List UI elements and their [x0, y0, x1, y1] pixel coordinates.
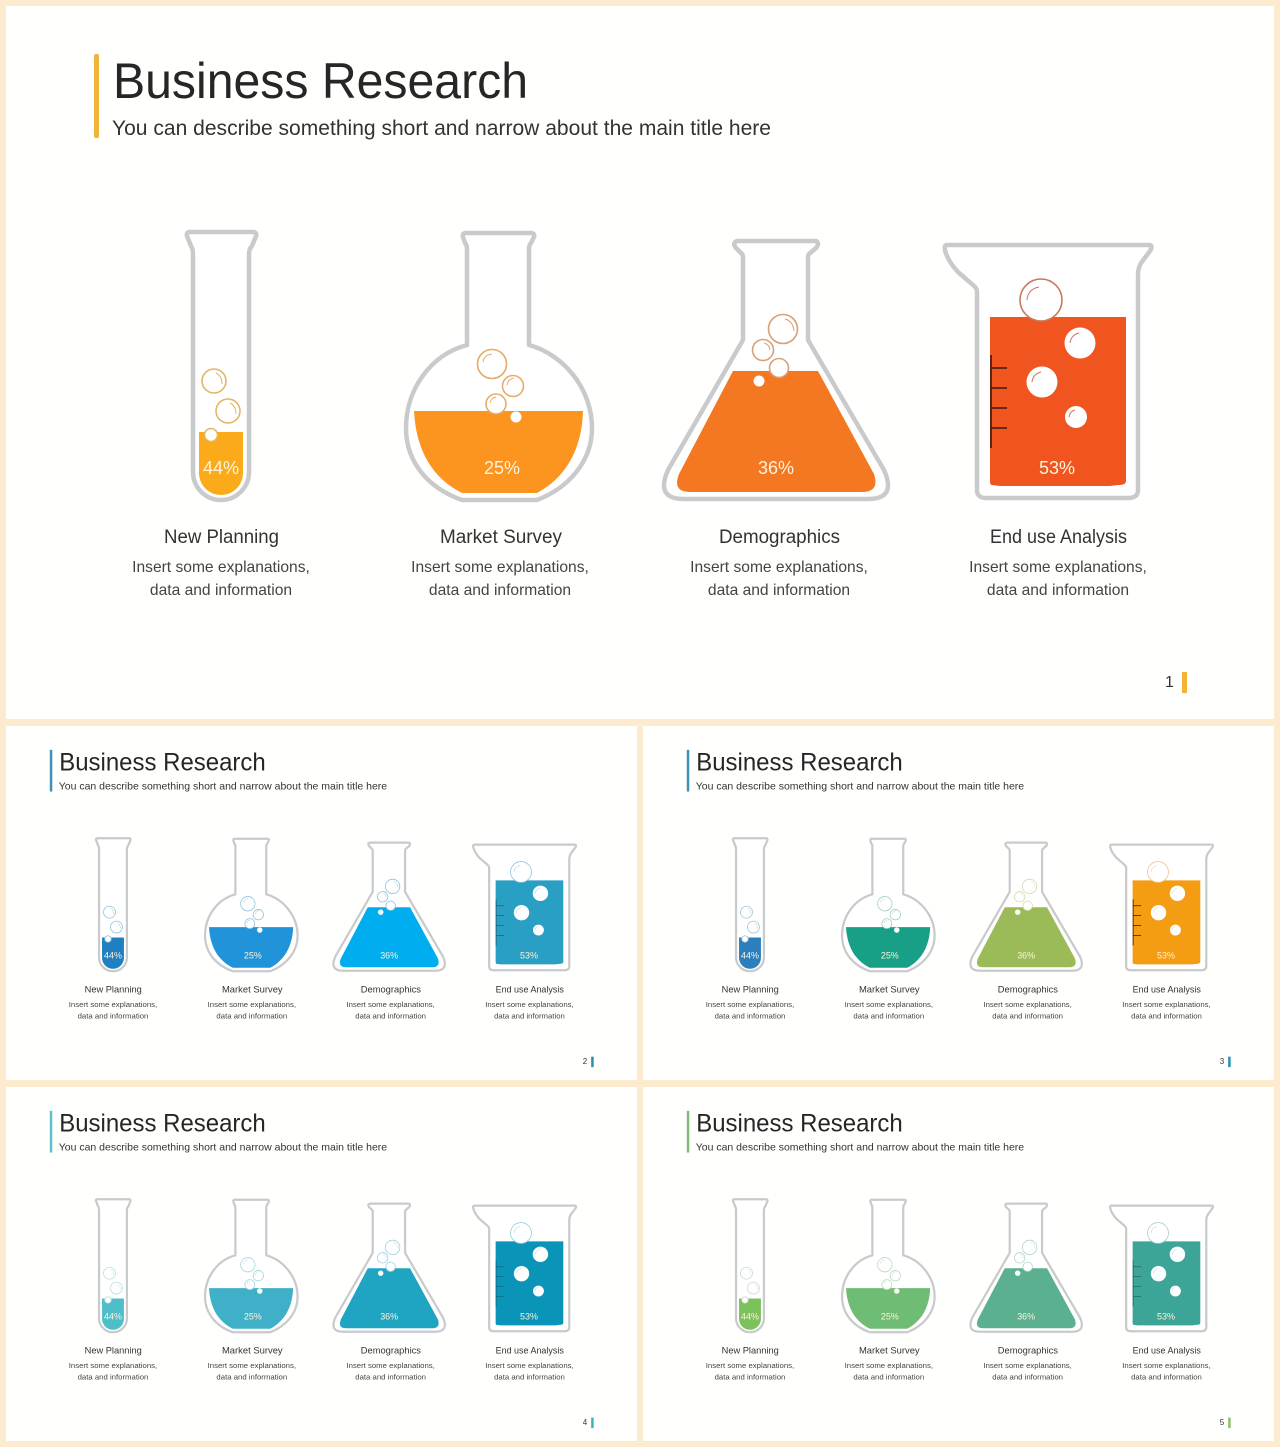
- panel background: [6, 1087, 637, 1441]
- icon: test tube 44%: [187, 232, 256, 500]
- icon: conical flask 36%: [333, 1204, 445, 1332]
- icon: conical flask 36%: [664, 241, 888, 499]
- icon: round flask 25%: [842, 839, 935, 971]
- column: New Planning: [69, 985, 157, 1020]
- slide 1: amber: [6, 6, 1274, 719]
- panel background: [6, 6, 1274, 719]
- column: New Planning: Insert some explanations,: [706, 1361, 794, 1370]
- icon: conical flask 36%: 36%: [758, 458, 794, 478]
- icon: beaker 53%: [473, 845, 576, 970]
- icon: beaker 53%: 53%: [1039, 458, 1075, 478]
- subtitle: You can describe something short and narrow about the main title here: [696, 782, 1024, 793]
- icon: conical flask 36%: 36%: [1017, 1311, 1035, 1321]
- icon: beaker 53%: 53%: [520, 1311, 538, 1321]
- column: Market Survey: data and information: [216, 1372, 287, 1381]
- column: New Planning: New Planning: [85, 985, 142, 996]
- title: Business Research: [113, 53, 528, 109]
- icon: test tube 44%: [733, 838, 768, 971]
- icon: round flask 25%: 25%: [881, 950, 899, 960]
- title accent bar: [94, 54, 99, 138]
- page number: 1: [1165, 674, 1174, 691]
- icon: beaker 53%: [1110, 845, 1213, 970]
- column: Demographics: data and information: [708, 582, 850, 599]
- column: Demographics: Demographics: [719, 527, 840, 548]
- column: End use Analysis: Insert some explanations,: [1122, 1000, 1211, 1009]
- icon: beaker 53%: 53%: [1157, 950, 1175, 960]
- column: Market Survey: Insert some explanations,: [208, 1000, 296, 1009]
- column: End use Analysis: data and information: [494, 1372, 565, 1381]
- page number: [583, 1418, 594, 1428]
- page number: 4: [583, 1418, 588, 1427]
- page number: [583, 1057, 594, 1067]
- column: New Planning: data and information: [150, 582, 292, 599]
- icon: round flask 25%: 25%: [244, 950, 262, 960]
- page number: 5: [1220, 1418, 1225, 1427]
- icon: test tube 44%: 44%: [741, 1311, 759, 1321]
- column: Demographics: Insert some explanations,: [983, 1361, 1072, 1370]
- column: Demographics: Insert some explanations,: [690, 559, 868, 576]
- icon: test tube 44%: 44%: [741, 950, 759, 960]
- icon: test tube 44%: 44%: [104, 1311, 122, 1321]
- column: New Planning: Insert some explanations,: [69, 1000, 157, 1009]
- column: Market Survey: [411, 527, 589, 599]
- column: End use Analysis: data and information: [1131, 1011, 1202, 1020]
- icon: beaker 53%: [473, 1206, 576, 1331]
- column: New Planning: New Planning: [722, 985, 779, 996]
- title: Business Research: [696, 750, 903, 777]
- column: End use Analysis: data and information: [494, 1011, 565, 1020]
- column: Demographics: Demographics: [998, 985, 1058, 996]
- column: New Planning: [132, 527, 310, 599]
- column: End use Analysis: data and information: [1131, 1372, 1202, 1381]
- column: Demographics: data and information: [992, 1372, 1063, 1381]
- column: New Planning: Insert some explanations,: [69, 1361, 157, 1370]
- page number: 2: [583, 1057, 588, 1066]
- column: New Planning: [69, 1346, 157, 1381]
- title: Business Research: [59, 1111, 266, 1138]
- subtitle: You can describe something short and narrow about the main title here: [59, 782, 387, 793]
- panel background: [6, 726, 637, 1080]
- icon: beaker 53%: [1110, 1206, 1213, 1331]
- column: Demographics: [346, 1346, 435, 1381]
- icon: test tube 44%: 44%: [203, 458, 239, 478]
- column: Market Survey: data and information: [853, 1372, 924, 1381]
- column: Market Survey: Market Survey: [440, 527, 562, 548]
- column: New Planning: New Planning: [85, 1346, 142, 1357]
- column: Demographics: data and information: [355, 1372, 426, 1381]
- icon: round flask 25%: [205, 839, 298, 971]
- panel background: [643, 1087, 1274, 1441]
- column: Demographics: [690, 527, 868, 599]
- column: New Planning: data and information: [715, 1011, 785, 1020]
- column: Demographics: [346, 985, 435, 1020]
- column: End use Analysis: End use Analysis: [496, 985, 564, 996]
- column: End use Analysis: Insert some explanations,: [485, 1000, 574, 1009]
- column: New Planning: data and information: [78, 1372, 148, 1381]
- column: Market Survey: Insert some explanations,: [845, 1000, 933, 1009]
- icon: conical flask 36%: [970, 843, 1082, 971]
- column: Demographics: Insert some explanations,: [346, 1000, 435, 1009]
- column: Market Survey: data and information: [853, 1011, 924, 1020]
- column: End use Analysis: End use Analysis: [990, 527, 1127, 548]
- column: New Planning: [706, 985, 794, 1020]
- icon: test tube 44%: [96, 1199, 131, 1332]
- column: Demographics: Demographics: [998, 1346, 1058, 1357]
- column: End use Analysis: End use Analysis: [1133, 985, 1201, 996]
- page number: [1165, 672, 1187, 693]
- column: End use Analysis: End use Analysis: [1133, 1346, 1201, 1357]
- column: Market Survey: [845, 1346, 933, 1381]
- column: Market Survey: Market Survey: [859, 985, 920, 996]
- column: Market Survey: Market Survey: [859, 1346, 920, 1357]
- slide 2: blue: [6, 726, 637, 1080]
- column: Market Survey: data and information: [429, 582, 571, 599]
- slide 4: teal: [6, 1087, 637, 1441]
- column: New Planning: data and information: [715, 1372, 785, 1381]
- column: Demographics: [983, 1346, 1072, 1381]
- column: End use Analysis: Insert some explanations,: [485, 1361, 574, 1370]
- column: End use Analysis: Insert some explanations,: [969, 559, 1147, 576]
- column: Demographics: Insert some explanations,: [346, 1361, 435, 1370]
- icon: conical flask 36%: 36%: [380, 950, 398, 960]
- icon: conical flask 36%: 36%: [1017, 950, 1035, 960]
- column: Market Survey: [208, 985, 296, 1020]
- page number: [1220, 1418, 1231, 1428]
- icon: round flask 25%: 25%: [484, 458, 520, 478]
- subtitle: You can describe something short and narrow about the main title here: [112, 117, 771, 140]
- icon: beaker 53%: [945, 245, 1152, 498]
- column: End use Analysis: [1122, 985, 1211, 1020]
- icon: test tube 44%: 44%: [104, 950, 122, 960]
- column: Demographics: data and information: [355, 1011, 426, 1020]
- column: Market Survey: Insert some explanations,: [208, 1361, 296, 1370]
- icon: test tube 44%: [733, 1199, 768, 1332]
- title accent bar: [50, 1111, 52, 1153]
- column: Demographics: Demographics: [361, 985, 421, 996]
- icon: beaker 53%: 53%: [520, 950, 538, 960]
- column: Market Survey: Insert some explanations,: [411, 559, 589, 576]
- page number: [1220, 1057, 1231, 1067]
- title accent bar: [687, 1111, 689, 1153]
- column: Market Survey: Market Survey: [222, 1346, 283, 1357]
- column: New Planning: data and information: [78, 1011, 148, 1020]
- icon: round flask 25%: 25%: [244, 1311, 262, 1321]
- column: Demographics: data and information: [992, 1011, 1063, 1020]
- column: Market Survey: Market Survey: [222, 985, 283, 996]
- column: End use Analysis: Insert some explanations,: [1122, 1361, 1211, 1370]
- column: End use Analysis: End use Analysis: [496, 1346, 564, 1357]
- column: End use Analysis: [485, 985, 574, 1020]
- column: New Planning: [706, 1346, 794, 1381]
- column: Demographics: [983, 985, 1072, 1020]
- icon: conical flask 36%: [333, 843, 445, 971]
- icon: conical flask 36%: [970, 1204, 1082, 1332]
- subtitle: You can describe something short and narrow about the main title here: [696, 1143, 1024, 1154]
- subtitle: You can describe something short and narrow about the main title here: [59, 1143, 387, 1154]
- icon: round flask 25%: [842, 1200, 935, 1332]
- column: Market Survey: data and information: [216, 1011, 287, 1020]
- panel background: [643, 726, 1274, 1080]
- icon: test tube 44%: [96, 838, 131, 971]
- icon: beaker 53%: 53%: [1157, 1311, 1175, 1321]
- column: End use Analysis: [1122, 1346, 1211, 1381]
- title accent bar: [50, 750, 52, 792]
- icon: round flask 25%: 25%: [881, 1311, 899, 1321]
- icon: round flask 25%: [406, 233, 592, 500]
- column: End use Analysis: [485, 1346, 574, 1381]
- column: Demographics: Insert some explanations,: [983, 1000, 1072, 1009]
- slide 3: mixed: [643, 726, 1274, 1080]
- column: New Planning: Insert some explanations,: [706, 1000, 794, 1009]
- title accent bar: [687, 750, 689, 792]
- column: Market Survey: [845, 985, 933, 1020]
- column: Market Survey: [208, 1346, 296, 1381]
- column: End use Analysis: data and information: [987, 582, 1129, 599]
- page number: 3: [1220, 1057, 1225, 1066]
- column: Demographics: Demographics: [361, 1346, 421, 1357]
- column: Market Survey: Insert some explanations,: [845, 1361, 933, 1370]
- icon: round flask 25%: [205, 1200, 298, 1332]
- column: New Planning: New Planning: [164, 527, 279, 548]
- slide 5: green: [643, 1087, 1274, 1441]
- icon: conical flask 36%: 36%: [380, 1311, 398, 1321]
- title: Business Research: [59, 750, 266, 777]
- column: End use Analysis: [969, 527, 1147, 599]
- column: New Planning: New Planning: [722, 1346, 779, 1357]
- title: Business Research: [696, 1111, 903, 1138]
- column: New Planning: Insert some explanations,: [132, 559, 310, 576]
